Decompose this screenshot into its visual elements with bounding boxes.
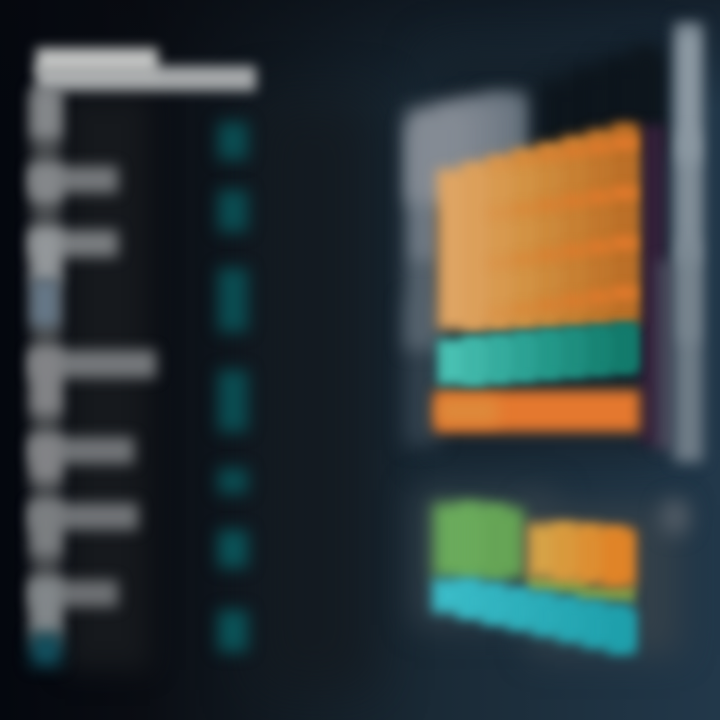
heading [26,38,265,100]
panel: left list backing [70,100,142,666]
reflection: grey haze backing [408,483,682,658]
orange stripes [512,132,643,312]
panel: area right of markers [332,130,360,660]
list of row labels [18,81,166,676]
device: inner edge glow [652,256,674,454]
chart: orange striped block [428,114,648,339]
reflection: teal block [423,570,644,662]
reflection: olive strip [522,572,642,607]
device: grey bezel [392,81,537,450]
chart: teal band [429,314,645,394]
device: dark top area [530,41,670,140]
reflection panel [408,484,697,664]
teal value markers [210,114,256,660]
top shade [0,0,720,110]
reflection: light patch [655,493,696,540]
device: purple side shadow [638,121,668,446]
chart: orange band [422,380,650,442]
reflection: green block [422,492,532,586]
reflection: orange block [518,512,646,594]
device: right edge highlight [664,14,712,470]
device: screen body [450,65,652,460]
